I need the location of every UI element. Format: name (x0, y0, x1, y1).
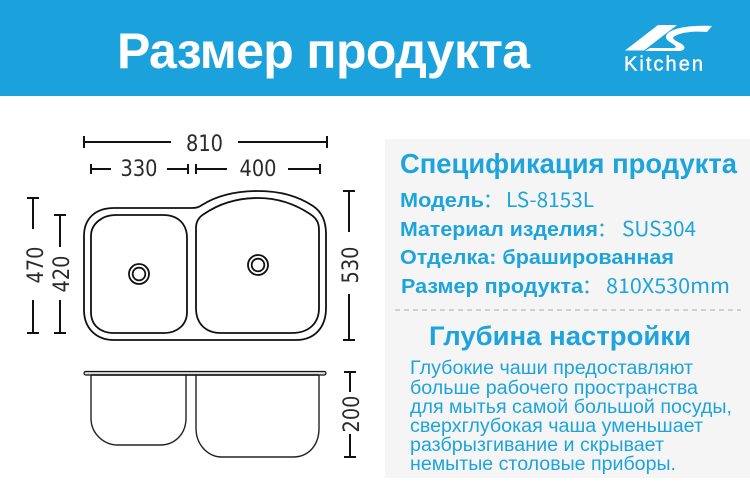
depth description (410, 358, 732, 475)
rim (84, 372, 326, 375)
sink top view (84, 191, 326, 340)
spec: size: Размер продукта (401, 275, 584, 298)
depth description: для мытья самой большой посуды, (410, 397, 732, 418)
right drain (248, 255, 268, 275)
dimension: left bowl width 330 (91, 156, 188, 182)
sink outline (84, 191, 326, 340)
dimension: depth 200 (339, 372, 365, 457)
dimension: height 530 (338, 191, 364, 340)
spec: material (400, 212, 696, 242)
header band (0, 0, 750, 96)
dimension: height 470 (23, 198, 49, 333)
left bowl (91, 215, 187, 333)
spec: material: ： (597, 213, 617, 242)
spec: material: SUS304 (622, 212, 696, 242)
dimension: right bowl width 400: 400 (240, 156, 276, 182)
spec: model: Модель (400, 189, 484, 212)
left bowl profile (91, 375, 186, 445)
dimension: height 420 (49, 215, 75, 333)
spec: size (401, 269, 730, 299)
dimension: overall width 810 (84, 131, 327, 157)
dimension: left bowl width 330: 330 (120, 156, 158, 182)
spec: material: Материал изделия (400, 218, 598, 241)
right bowl (196, 198, 319, 333)
dimension: right bowl width 400 (196, 156, 320, 182)
dimension: depth 200: 200 (339, 396, 365, 432)
logo: Kitchen (624, 25, 712, 76)
logo: Kitchen: Kitchen (624, 54, 703, 76)
sink side view (84, 372, 326, 457)
heading: specification: Спецификация продукта (400, 148, 738, 179)
spec: model: ： (483, 184, 503, 213)
depth description: сверхглубокая чаша уменьшает (410, 416, 703, 437)
spec: size: ： (582, 270, 602, 299)
spec: model (400, 183, 594, 213)
depth description: больше рабочего пространства (410, 378, 698, 399)
right bowl profile (196, 375, 319, 457)
spec: model: LS-8153L (506, 183, 594, 213)
depth description: разбрызгивание и скрывает (410, 435, 664, 456)
heading: depth: Глубина настройки (429, 321, 691, 351)
depth description: немытые столовые приборы. (410, 454, 676, 475)
dimension: overall width 810: 810 (186, 131, 223, 157)
dimension: height 420: 420 (49, 256, 75, 292)
depth description: Глубокие чаши предоставляют (410, 358, 693, 379)
panel: specification (385, 139, 750, 478)
dimension: height 530: 530 (338, 246, 364, 284)
spec: size: 810X530mm (606, 269, 730, 299)
spec: finish: Отделка: брашированная (400, 246, 674, 269)
left drain (129, 264, 149, 284)
dimension: height 470: 470 (23, 246, 49, 284)
title: Размер продукта (117, 23, 531, 79)
